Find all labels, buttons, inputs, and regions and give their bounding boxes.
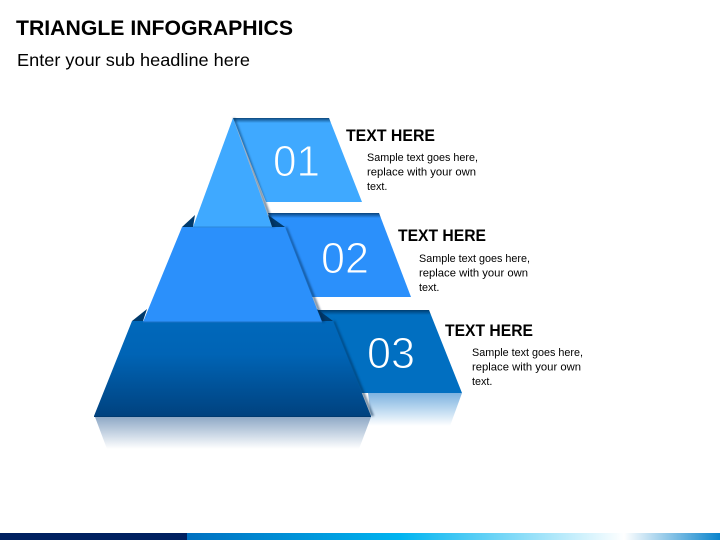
text block 2: text.: [419, 282, 439, 294]
text block 3: replace with your own: [472, 362, 581, 374]
text block 3: TEXT HERE: [445, 321, 533, 340]
footer bar: [0, 533, 720, 540]
panel 01: [233, 118, 362, 202]
pyramid tier 3: [94, 309, 374, 416]
panel 03: [317, 310, 462, 393]
text block 2: Sample text goes here,: [419, 253, 530, 265]
panel 02: [268, 213, 411, 297]
text block 3: Sample text goes here,: [472, 347, 583, 359]
text block 1: replace with your own: [367, 166, 476, 178]
number 01: 01: [273, 137, 320, 186]
number 02: 02: [321, 234, 369, 283]
text block 2: [398, 226, 530, 294]
text block 3: text.: [472, 376, 492, 388]
number 03: 03: [367, 329, 415, 378]
text block 1: text.: [367, 181, 387, 193]
subtitle: Enter your sub headline here: [17, 50, 250, 70]
text block 1: TEXT HERE: [346, 126, 435, 145]
pyramid tier 1: [193, 118, 275, 227]
text block 2: replace with your own: [419, 268, 528, 280]
text block 1: [346, 126, 478, 193]
title: TRIANGLE INFOGRAPHICS: [16, 16, 293, 40]
text block 1: Sample text goes here,: [367, 152, 478, 164]
pyramid tier 2: [143, 215, 325, 322]
reflection under pyramid: [95, 393, 462, 449]
text block 3: [445, 321, 583, 388]
text block 2: TEXT HERE: [398, 226, 486, 245]
